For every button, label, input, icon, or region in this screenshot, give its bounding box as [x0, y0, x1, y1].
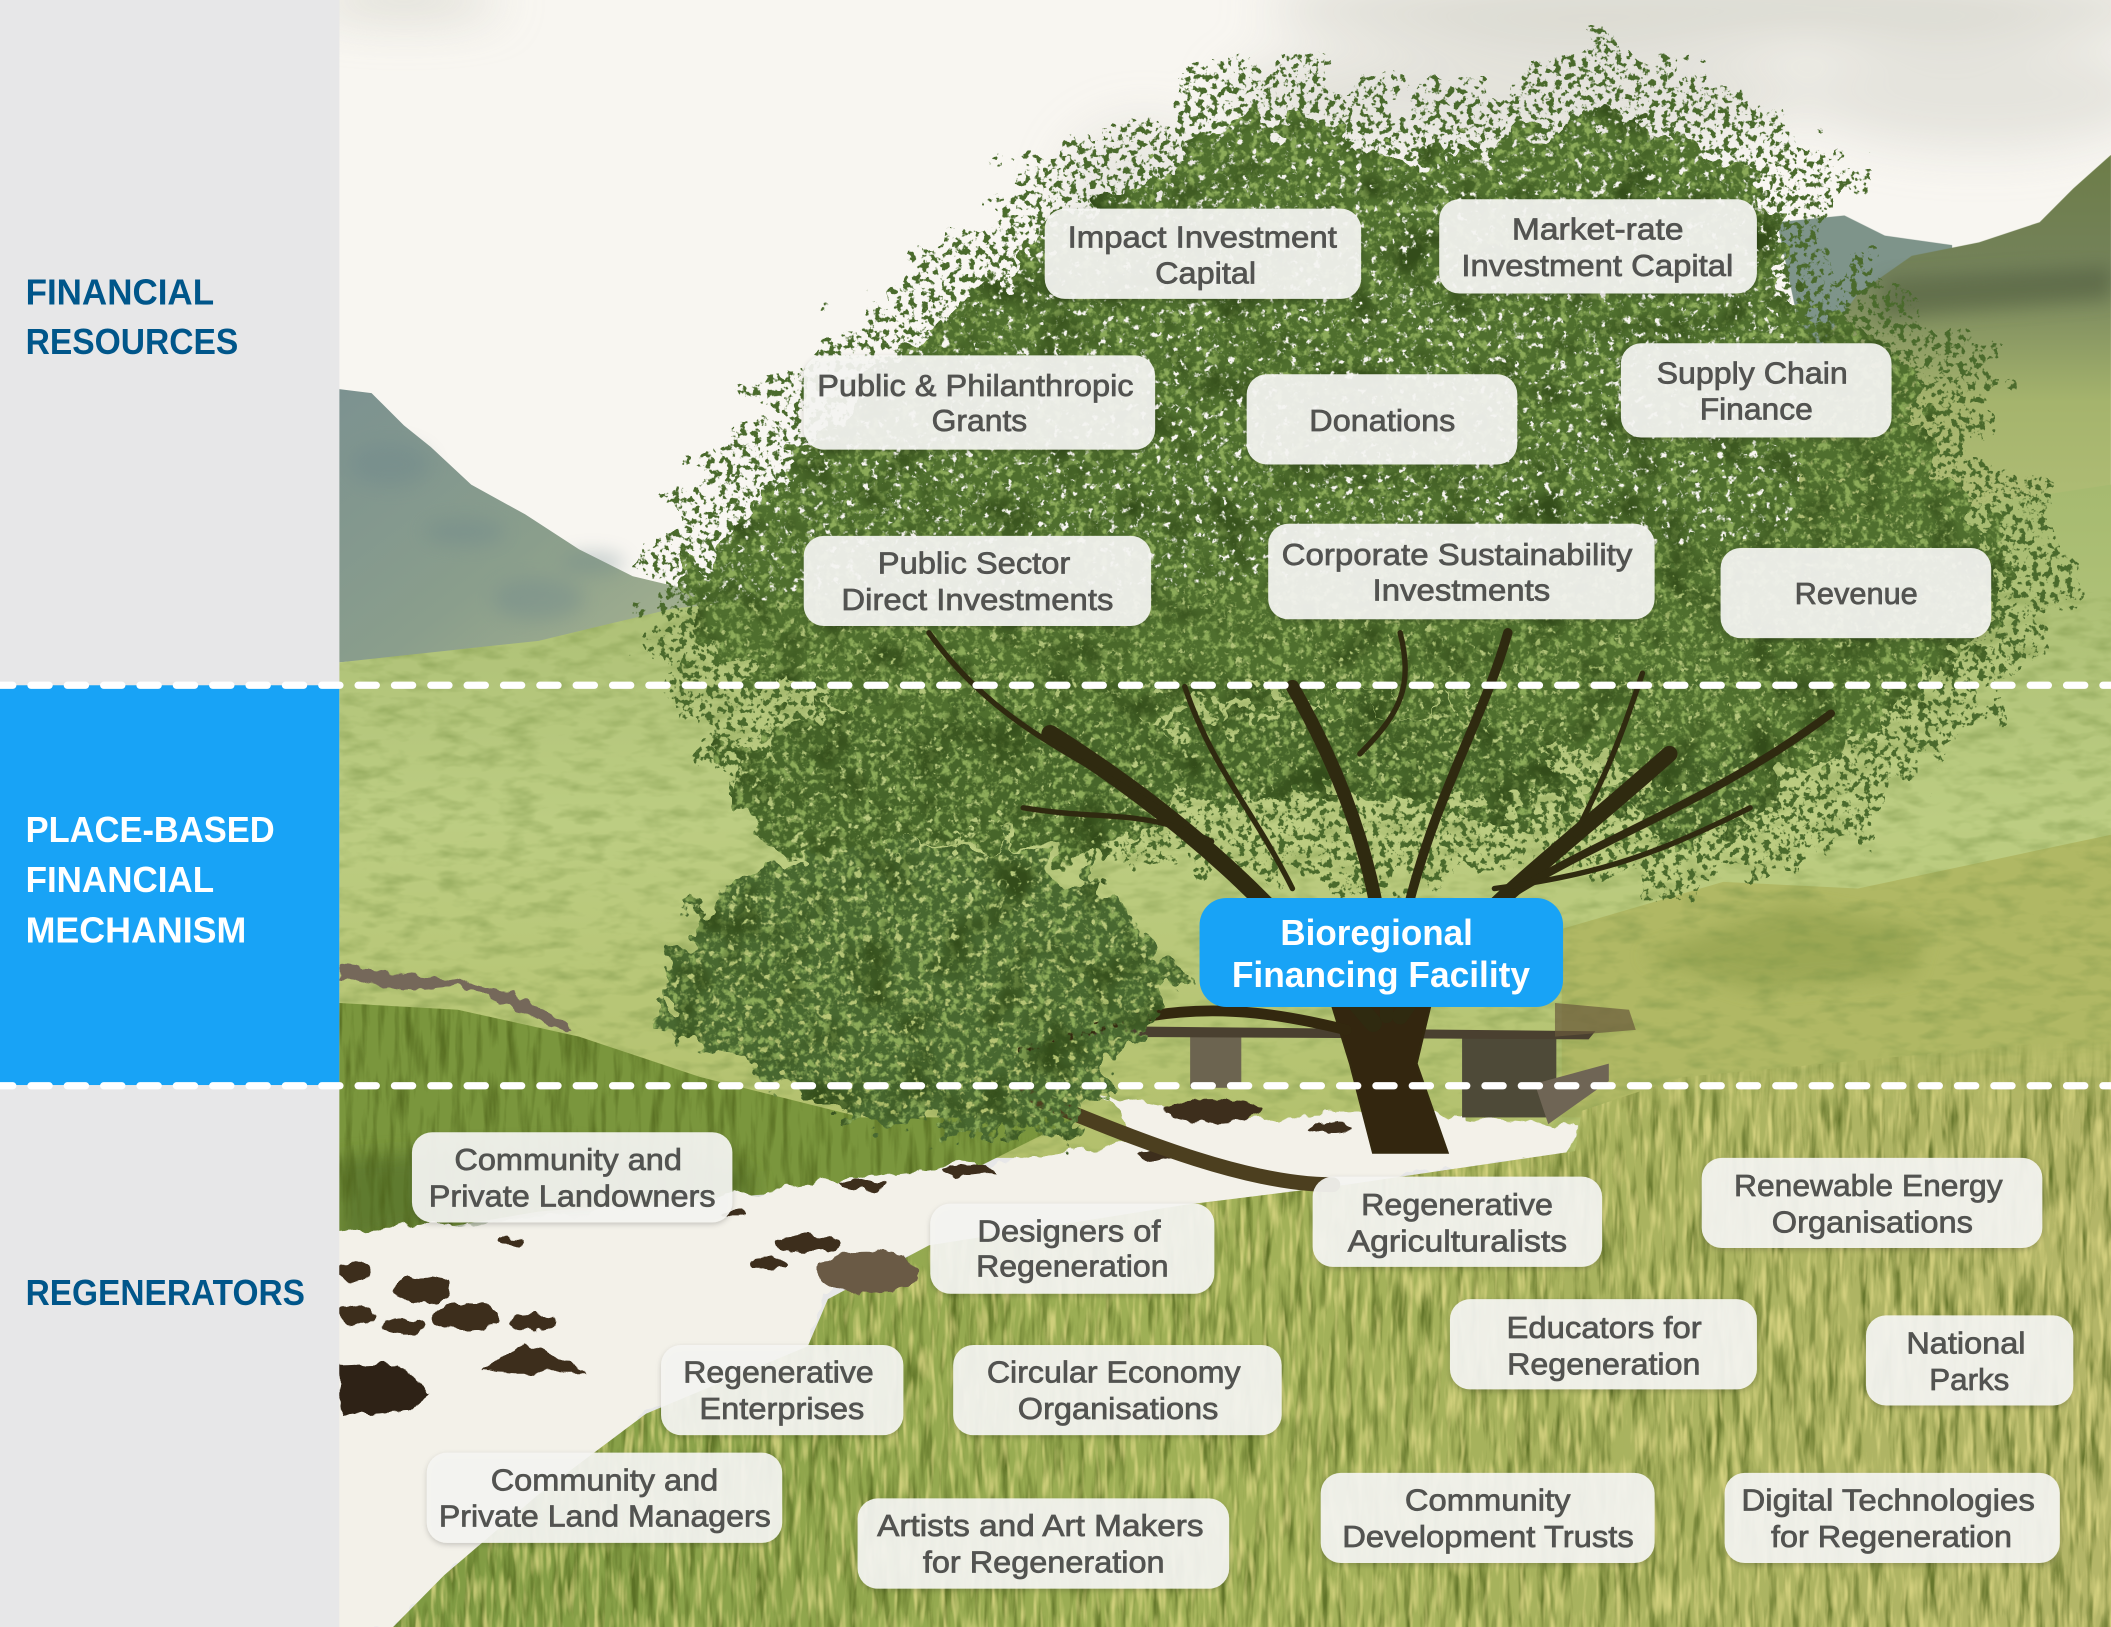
pill: Supply Chain Finance: Finance — [1700, 391, 1813, 426]
pill: Impact Investment Capital — [1045, 209, 1361, 299]
heading: place-based financial mechanism: PLACE-BASED — [26, 810, 275, 850]
pill: Regenerative Enterprises — [661, 1345, 903, 1435]
pill: Artists and Art Makers for Regeneration: for Regeneration — [923, 1544, 1165, 1579]
pill: Supply Chain Finance: Supply Chain — [1657, 356, 1848, 391]
river — [269, 1093, 1575, 1627]
pill: Public Sector Direct Investments: Public Sector — [878, 546, 1070, 581]
bridge — [1077, 1003, 1636, 1124]
pill: Community and Private Landowners: Private Landowners — [429, 1178, 716, 1213]
pill: Donations — [1247, 374, 1517, 464]
pill: Regenerative Agriculturalists: Regenerative — [1361, 1187, 1553, 1222]
meadow — [339, 485, 2111, 1158]
pill: Public & Philanthropic Grants: Public & Philanthropic — [817, 368, 1134, 403]
heading: place-based financial mechanism: FINANCIAL — [26, 860, 214, 900]
pill: Digital Technologies for Regeneration: Digital Technologies — [1741, 1483, 2035, 1518]
pill: Market-rate Investment Capital — [1439, 199, 1757, 293]
pill: Educators for Regeneration — [1450, 1299, 1757, 1389]
sidebar: regenerators — [0, 1085, 339, 1627]
pill: National Parks — [1866, 1315, 2073, 1406]
pill: Digital Technologies for Regeneration — [1725, 1473, 2060, 1563]
pill: Designers of Regeneration: Regeneration — [976, 1248, 1169, 1283]
tree: trunk and back branches — [1023, 1007, 1447, 1185]
pill: Designers of Regeneration: Designers of — [977, 1213, 1161, 1248]
heading: place-based financial mechanism: MECHANISM — [26, 910, 246, 950]
stone wall — [339, 967, 572, 1034]
highlighted pill: Bioregional Financing Facility: Financing Facility — [1232, 955, 1530, 995]
sky — [339, 0, 2111, 700]
pill: Circular Economy Organisations — [953, 1345, 1282, 1435]
pill: Supply Chain Finance — [1621, 343, 1892, 438]
highlighted pill: Bioregional Financing Facility: Bioregional — [1280, 913, 1473, 953]
pill: Impact Investment Capital: Capital — [1155, 255, 1256, 290]
foreground grass — [339, 1037, 2111, 1627]
left mountain — [339, 389, 700, 662]
tree: sparse outer foliage — [633, 34, 2060, 889]
pill: Public Sector Direct Investments: Direct Investments — [841, 582, 1113, 617]
sidebar: place-based financial mechanism — [0, 685, 339, 1085]
dashed divider: top — [0, 683, 2111, 688]
pill: Educators for Regeneration: Regeneration — [1507, 1347, 1700, 1382]
pill: Circular Economy Organisations: Organisations — [1018, 1391, 1218, 1426]
pill: Renewable Energy Organisations — [1702, 1158, 2042, 1248]
pill: Artists and Art Makers for Regeneration — [858, 1498, 1229, 1589]
tree: foliage crown — [687, 108, 1999, 862]
pill: Artists and Art Makers for Regeneration: Artists and Art Makers — [877, 1508, 1204, 1543]
distant right ridge — [1777, 215, 1952, 350]
sidebar: financial resources — [0, 0, 339, 685]
pill: Regenerative Enterprises: Regenerative — [683, 1355, 874, 1390]
tree: lower left bush — [660, 841, 1185, 1144]
pill: Market-rate Investment Capital: Investment Capital — [1461, 248, 1733, 283]
pill: Corporate Sustainability Investments: Investments — [1373, 572, 1550, 607]
left bank grass — [339, 1003, 1077, 1245]
pill: Digital Technologies for Regeneration: for Regeneration — [1771, 1519, 2012, 1554]
pill: National Parks: Parks — [1929, 1362, 2009, 1397]
right mountain — [1791, 155, 2111, 565]
highlighted pill: Bioregional Financing Facility — [1200, 898, 1563, 1007]
pill: Revenue — [1721, 548, 1991, 638]
dashed divider: bottom — [0, 1083, 2111, 1088]
tree: main branches — [929, 633, 1831, 1023]
pill: Community and Private Land Managers — [427, 1453, 782, 1543]
pill: Market-rate Investment Capital: Market-rate — [1512, 212, 1684, 247]
clouds — [310, 0, 2111, 256]
pill: Community and Private Land Managers: Community and — [491, 1462, 718, 1497]
pill: Corporate Sustainability Investments: Corporate Sustainability — [1282, 537, 1633, 572]
pill: Renewable Energy Organisations: Renewable Energy — [1734, 1168, 2003, 1203]
pill: Community Development Trusts: Development Trusts — [1342, 1519, 1634, 1554]
pill: Community and Private Landowners: Community and — [454, 1142, 682, 1177]
pill: Educators for Regeneration: Educators for — [1507, 1310, 1702, 1345]
heading: financial resources: RESOURCES — [26, 322, 238, 362]
heading: regenerators: REGENERATORS — [26, 1273, 305, 1313]
pill: Circular Economy Organisations: Circular Economy — [987, 1355, 1241, 1390]
river rocks — [337, 1099, 1354, 1416]
pill: Community and Private Land Managers: Private Land Managers — [439, 1499, 771, 1534]
pill: Community Development Trusts: Community — [1405, 1483, 1571, 1518]
pill: Public Sector Direct Investments — [804, 536, 1151, 626]
pill: Public & Philanthropic Grants — [804, 355, 1155, 450]
pill: Renewable Energy Organisations: Organisations — [1772, 1205, 1973, 1240]
pill: Impact Investment Capital: Impact Investment — [1068, 220, 1337, 255]
pill: Donations: Donations — [1309, 403, 1455, 438]
heading: financial resources: FINANCIAL — [26, 272, 214, 312]
pill: Public & Philanthropic Grants: Grants — [932, 403, 1027, 438]
pill: Regenerative Agriculturalists — [1313, 1177, 1602, 1267]
pill: Regenerative Agriculturalists: Agriculturalists — [1348, 1223, 1567, 1258]
pill: National Parks: National — [1906, 1326, 2026, 1361]
pill: Corporate Sustainability Investments — [1268, 524, 1655, 619]
pill: Regenerative Enterprises: Enterprises — [699, 1391, 864, 1426]
pill: Community Development Trusts — [1321, 1473, 1655, 1563]
pill: Revenue: Revenue — [1795, 576, 1918, 611]
pill: Designers of Regeneration — [930, 1204, 1214, 1294]
pill: Community and Private Landowners — [412, 1132, 732, 1222]
